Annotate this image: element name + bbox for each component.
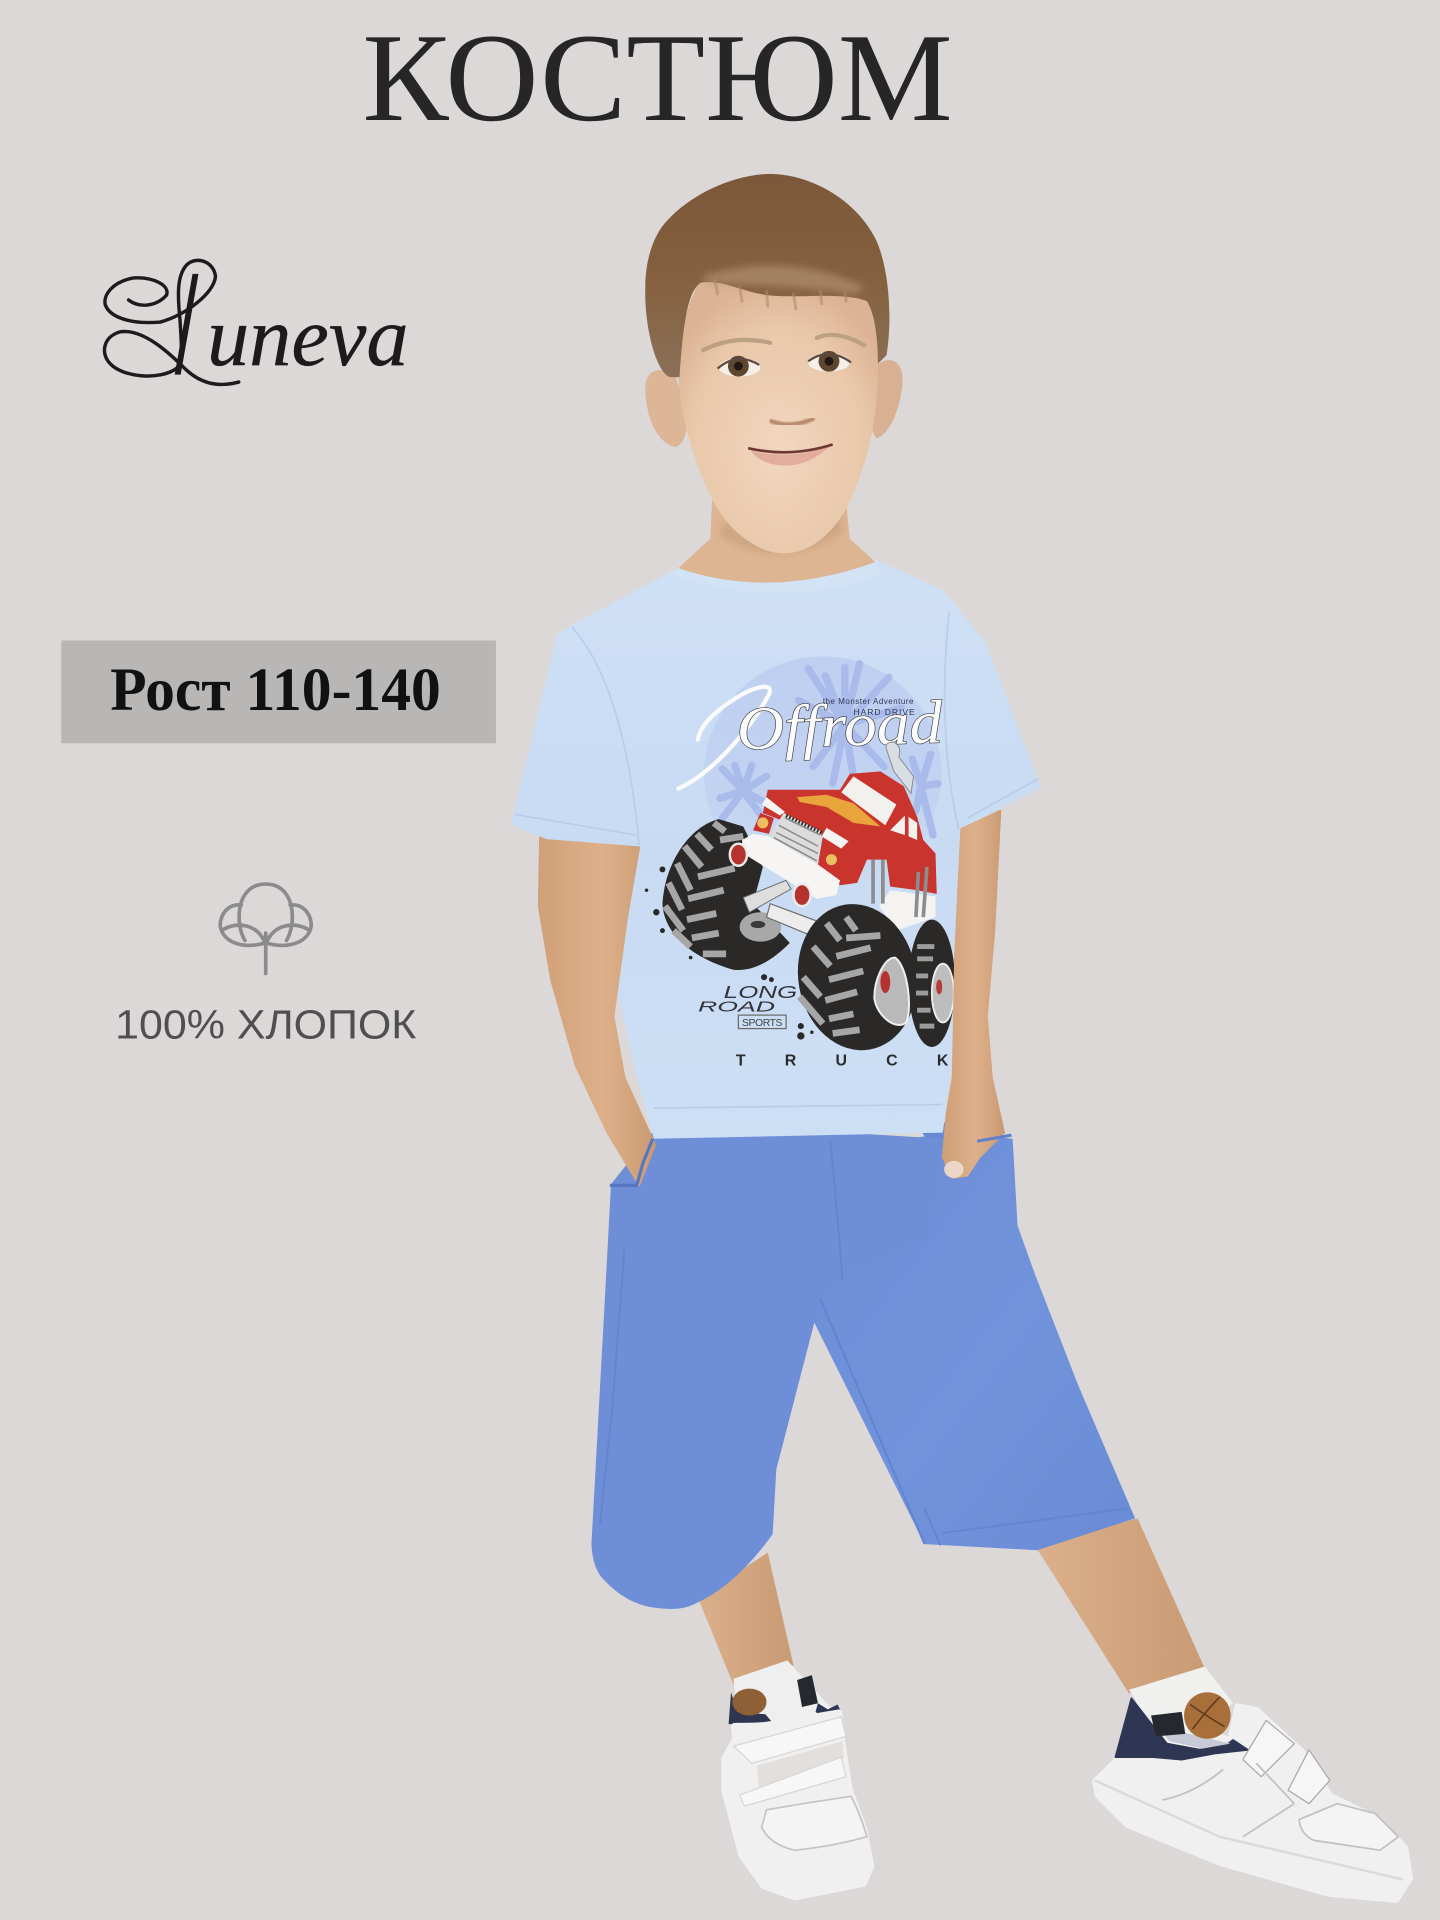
lower chassis	[879, 890, 936, 931]
eyebrows	[703, 335, 864, 350]
logo: Luneva	[104, 229, 409, 417]
neck shadow	[720, 514, 842, 554]
logo: Luneva: uneva	[207, 291, 409, 384]
headlight housing	[753, 813, 774, 834]
right sock	[1129, 1667, 1233, 1740]
right fingernail	[944, 1161, 964, 1178]
shirt print: monster truck: HARD DRIVE	[853, 707, 915, 717]
script swash	[678, 687, 770, 789]
left pocket edge	[610, 1139, 653, 1185]
fringe highlight	[700, 265, 864, 309]
headlights	[757, 817, 768, 828]
neck	[678, 490, 876, 583]
palm trees	[720, 664, 938, 835]
left eye	[718, 356, 760, 377]
front right wheel	[787, 895, 928, 1060]
title: КОСТЮМ	[362, 9, 953, 148]
tagline: the Monster Adventure	[823, 697, 914, 706]
right eye	[808, 351, 851, 372]
boy figure	[511, 174, 1409, 1899]
height badge: Рост 110-140	[110, 656, 441, 724]
shirt print: monster truck: ROAD	[698, 999, 776, 1015]
roof light bar	[886, 742, 913, 793]
lettering: long road: LONG	[724, 982, 797, 1002]
shirt print: monster truck	[645, 664, 988, 1069]
sports tag	[738, 1015, 786, 1029]
logo: Luneva: L	[155, 229, 251, 417]
left shoe	[725, 1675, 871, 1897]
right pocket edge	[977, 1135, 1011, 1141]
height badge	[61, 640, 496, 743]
left sock	[733, 1660, 833, 1724]
t-shirt	[511, 560, 1041, 1139]
material label: 100% ХЛОПОК	[115, 1001, 417, 1047]
right lower leg	[1035, 1518, 1206, 1693]
mouth	[748, 444, 833, 466]
left arm	[539, 838, 655, 1185]
left ear	[645, 370, 687, 447]
word: truck: TRUCK	[736, 1052, 988, 1069]
grille	[769, 813, 822, 864]
side windows	[890, 816, 917, 840]
right shoe	[1095, 1692, 1409, 1899]
hood bars	[762, 797, 849, 849]
hair	[645, 174, 889, 377]
icon: cotton boll	[220, 884, 311, 973]
left lower leg	[698, 1553, 793, 1685]
right arm	[943, 811, 1004, 1178]
rear wheel	[909, 920, 955, 1047]
windshield	[841, 776, 896, 825]
mud splatter	[645, 866, 814, 1040]
truck body	[763, 771, 937, 894]
left wheel	[662, 819, 790, 970]
nose	[771, 419, 813, 424]
lamps	[730, 844, 747, 866]
sports tag: SPORTS	[742, 1018, 783, 1029]
face	[678, 279, 878, 553]
bumper	[742, 834, 840, 899]
lettering: Offroad: Offroad	[736, 688, 944, 763]
print background circle	[704, 656, 942, 891]
shorts	[591, 1116, 1135, 1609]
flames	[797, 795, 880, 827]
right ear	[869, 360, 903, 438]
